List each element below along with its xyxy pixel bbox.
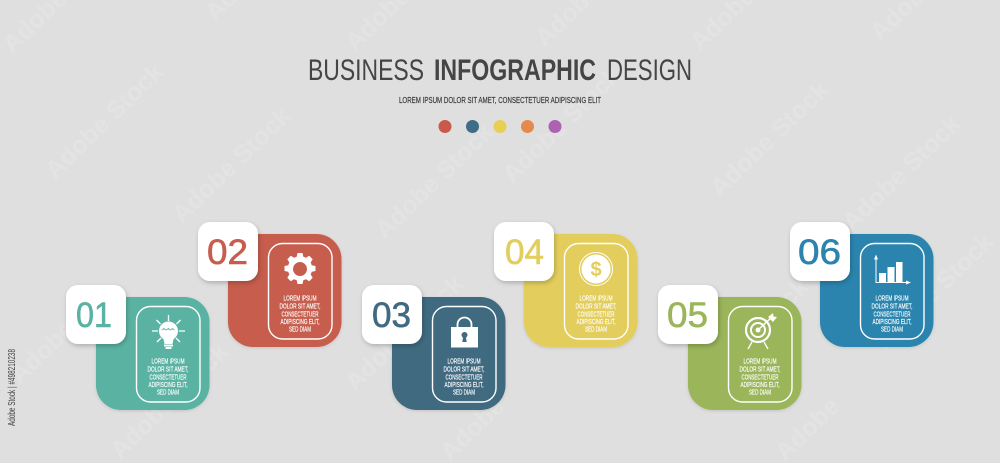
text block 02: CONSECTETUER xyxy=(282,312,318,318)
number 03 badge: 03 xyxy=(372,296,411,335)
text block 06: ADIPISCING ELIT, xyxy=(872,319,912,326)
title: BUSINESS xyxy=(308,54,424,87)
watermark pattern: Adobe Stock xyxy=(40,58,169,184)
panel: step 03 xyxy=(362,285,506,410)
number 02 badge: 02 xyxy=(207,233,248,272)
panel: step 05 xyxy=(658,285,802,410)
watermark pattern: Adobe Stock xyxy=(105,338,234,463)
number 04 badge xyxy=(494,222,554,281)
icon: dollar coin: $ xyxy=(590,259,602,281)
text block 02: DOLOR SIT AMET, xyxy=(280,304,321,310)
icon: bar chart xyxy=(874,254,911,284)
text block 02 xyxy=(280,296,321,334)
number 04 badge: 04 xyxy=(505,233,544,272)
number 03 badge xyxy=(362,285,422,344)
text block 04: ADIPISCING ELIT, xyxy=(576,319,616,326)
icon: padlock xyxy=(451,318,478,348)
icon: gear xyxy=(284,253,316,284)
number 02 badge xyxy=(198,222,258,281)
text block 02: ADIPISCING ELIT, xyxy=(280,319,320,326)
subtitle: LOREM IPSUM DOLOR SIT AMET, CONSECTETUER ADIPISCING ELIT xyxy=(399,96,601,105)
watermark pattern: Adobe Stock xyxy=(167,102,296,228)
text block 05: LOREM IPSUM xyxy=(744,358,777,366)
watermark pattern: Adobe Stock xyxy=(870,228,999,354)
text block 01 xyxy=(148,358,189,396)
text block 01: DOLOR SIT AMET, xyxy=(148,366,189,374)
text block 05 xyxy=(740,358,781,396)
text block 06: CONSECTETUER xyxy=(874,312,910,318)
number 01 badge: 01 xyxy=(76,296,112,335)
panel: step 02 xyxy=(198,222,342,347)
text block 06: LOREM IPSUM xyxy=(876,296,909,302)
panel: step 04 xyxy=(494,222,638,347)
text block 04: SED DIAM xyxy=(585,326,607,334)
text block 01: LOREM IPSUM xyxy=(152,358,185,366)
text block 03: ADIPISCING ELIT, xyxy=(444,382,484,389)
text block 05: CONSECTETUER xyxy=(742,374,778,382)
panel: step 01 xyxy=(66,285,210,410)
number 06 badge xyxy=(790,222,850,281)
text block 03: SED DIAM xyxy=(453,390,475,396)
text block 03 xyxy=(444,358,485,396)
watermark pattern: Adobe Stock xyxy=(705,76,834,202)
text block 04: CONSECTETUER xyxy=(578,312,614,318)
text block 03: CONSECTETUER xyxy=(446,374,482,382)
stock credit: Adobe Stock | #498210238 xyxy=(6,349,18,426)
text block 05: DOLOR SIT AMET, xyxy=(740,366,781,374)
text block 03: LOREM IPSUM xyxy=(448,358,481,366)
title: DESIGN xyxy=(607,54,692,87)
text block 06: SED DIAM xyxy=(881,326,903,334)
watermark pattern: Adobe Stock xyxy=(340,270,469,396)
text block 04 xyxy=(576,296,617,334)
colour dots xyxy=(438,120,562,133)
text block 03: DOLOR SIT AMET, xyxy=(444,366,485,374)
text block 05: ADIPISCING ELIT, xyxy=(740,382,780,389)
number 06 badge: 06 xyxy=(798,233,841,272)
watermark pattern: Adobe Stock xyxy=(837,110,966,236)
text block 05: SED DIAM xyxy=(749,390,771,396)
icon: target with arrow xyxy=(746,313,777,349)
panel: step 06 xyxy=(790,222,934,347)
watermark pattern: Adobe Stock xyxy=(497,62,626,188)
watermark pattern: Adobe Stock xyxy=(685,273,814,399)
text block 01: SED DIAM xyxy=(157,390,179,396)
text block 06: DOLOR SIT AMET, xyxy=(872,304,913,310)
text block 01: CONSECTETUER xyxy=(150,374,186,382)
title: INFOGRAPHIC xyxy=(434,54,596,87)
text block 04: DOLOR SIT AMET, xyxy=(576,304,617,310)
text block 02: SED DIAM xyxy=(289,326,311,334)
text block 02: LOREM IPSUM xyxy=(284,296,317,302)
icon: dollar coin xyxy=(580,252,612,286)
number 05 badge xyxy=(658,285,718,344)
number 05 badge: 05 xyxy=(667,296,708,335)
watermark pattern: Adobe xyxy=(5,315,80,389)
text block 04: LOREM IPSUM xyxy=(580,296,613,302)
text block 01: ADIPISCING ELIT, xyxy=(148,382,188,389)
text block 06 xyxy=(872,296,913,334)
title xyxy=(308,54,692,87)
number 01 badge xyxy=(66,285,126,344)
icon: light bulb xyxy=(152,315,185,349)
watermark pattern: Adobe Stock xyxy=(370,118,499,244)
